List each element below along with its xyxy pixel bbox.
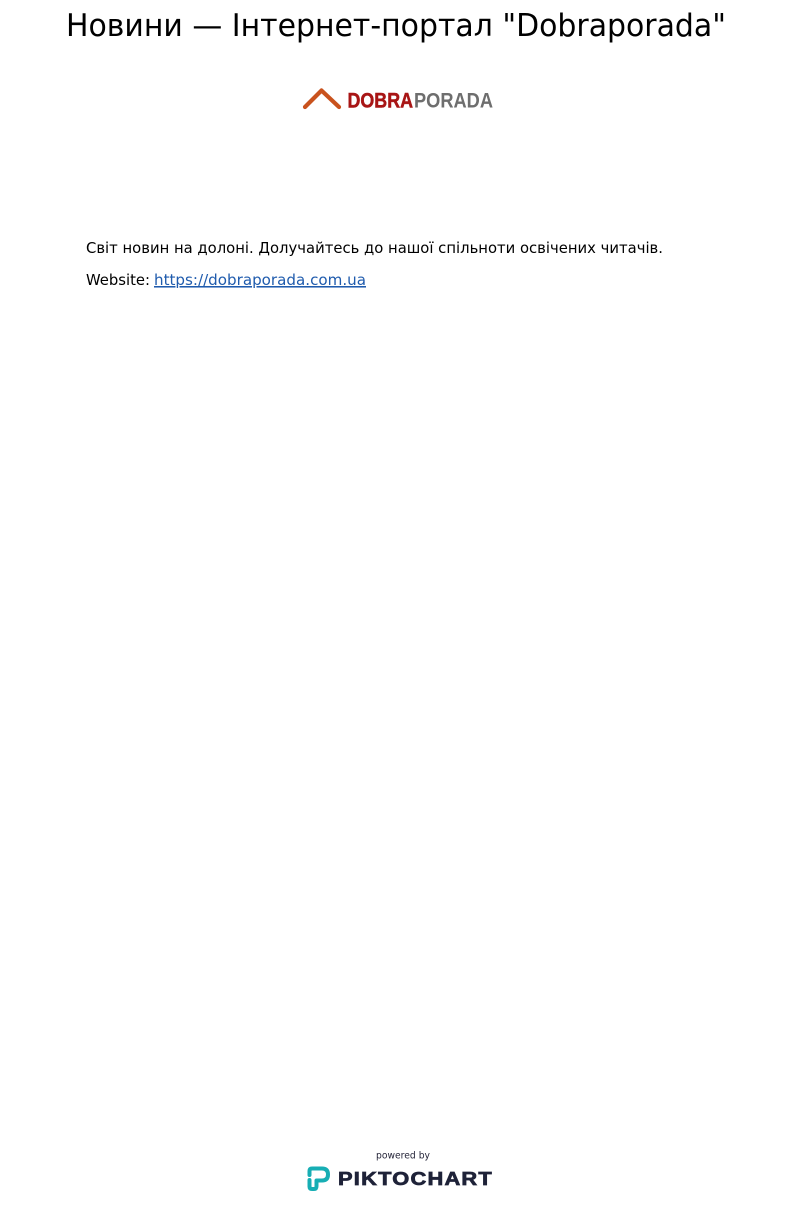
logo wordmark — [348, 88, 493, 112]
icon: Piktochart logo — [310, 1168, 328, 1189]
footer: Piktochart branding — [310, 1150, 493, 1189]
title: Новини — Інтернет-портал "Dobraporada" — [66, 8, 726, 44]
link: https://dobraporada.com.ua — [154, 271, 366, 289]
logo: Dobraporada — [305, 88, 493, 112]
logo wordmark: PORADA — [414, 88, 493, 112]
powered by: powered by — [376, 1150, 430, 1162]
logo wordmark: DOBRA — [348, 88, 413, 112]
text block: website: Website: — [86, 271, 150, 289]
text block: description: Світ новин на долоні. Долучайтесь до нашої спільноти освічених читачів. — [86, 239, 663, 257]
Piktochart wordmark: PIKTOCHART — [338, 1169, 493, 1189]
icon: roof chevron — [305, 90, 339, 107]
text block: website — [86, 271, 366, 289]
